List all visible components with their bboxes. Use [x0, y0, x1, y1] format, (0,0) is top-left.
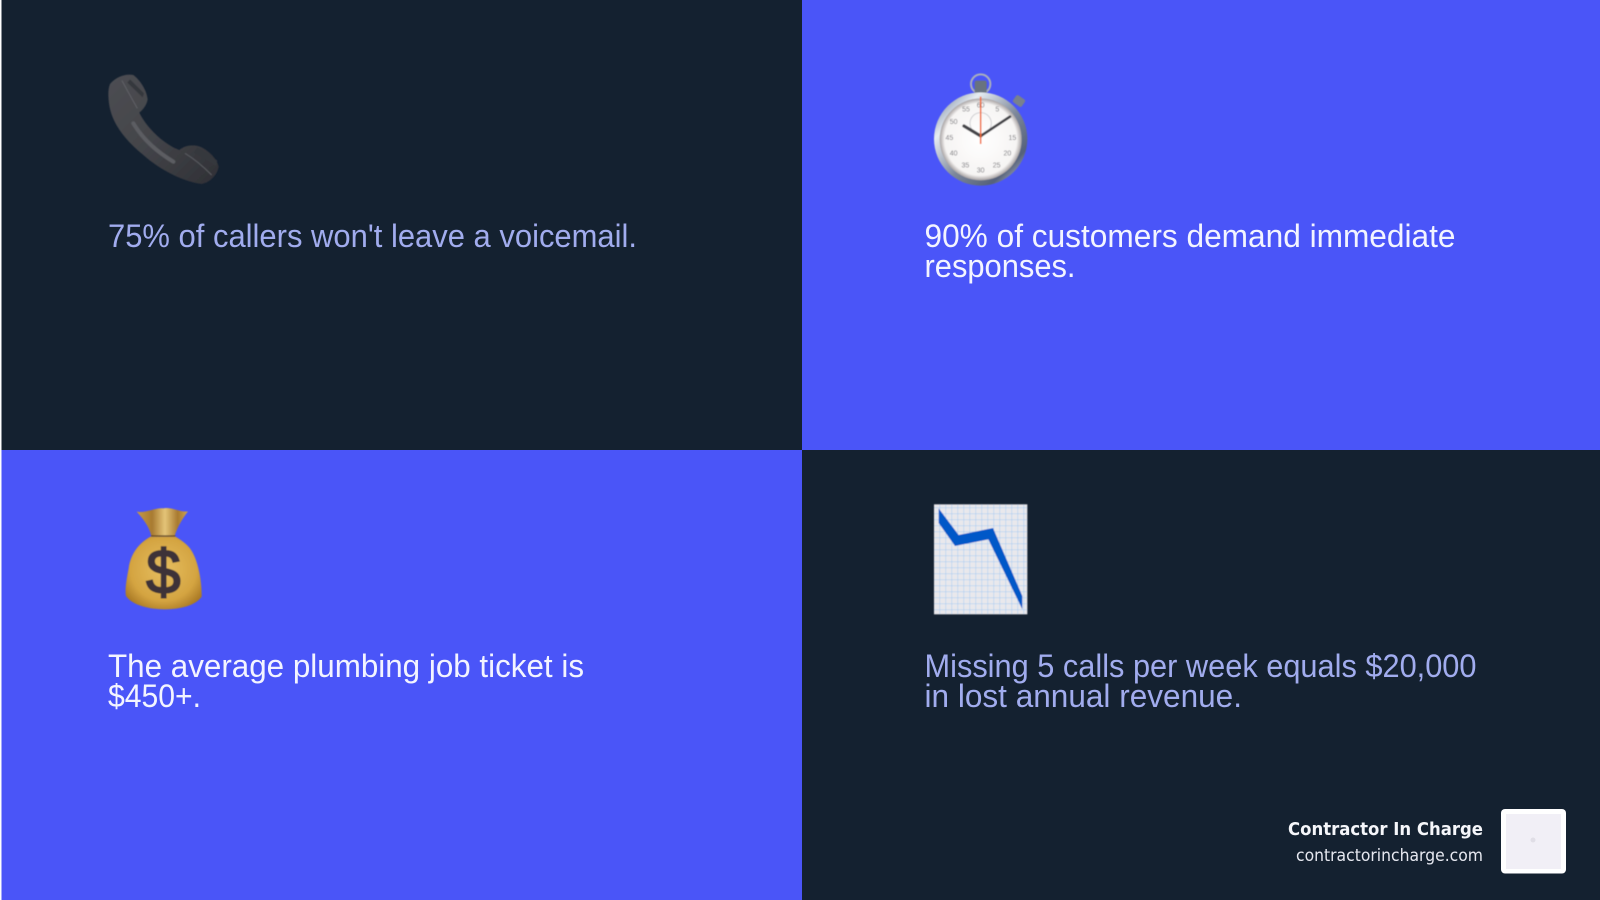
panel: average job ticket statistic	[2, 450, 802, 900]
statistic text: Missing 5 calls per week equals $20,000	[924, 648, 1476, 684]
dial numerals: 20	[1003, 151, 1011, 158]
dial numerals: 30	[977, 168, 985, 175]
panel: average job ticket statistic: $450+.	[108, 678, 201, 714]
statistic text: 75% of callers won't leave a voicemail.	[108, 218, 637, 254]
dial numerals: 40	[950, 151, 958, 158]
dial numerals: 5	[995, 107, 999, 114]
panel: immediate responses statistic	[802, 0, 1600, 450]
icon: money bag	[126, 508, 202, 609]
dial numerals: 15	[1008, 135, 1016, 142]
dial numerals	[945, 102, 1016, 175]
icon: stopwatch	[934, 74, 1027, 186]
panel: immediate responses statistic: responses.	[924, 248, 1076, 284]
dial numerals: 45	[945, 135, 953, 142]
statistic text: 90% of customers demand immediate	[924, 218, 1456, 254]
panel: voicemail statistic	[2, 0, 802, 450]
brand website: contractorincharge.com	[1296, 846, 1483, 865]
brand name: Contractor In Charge	[1288, 819, 1483, 840]
statistic text: The average plumbing job ticket is	[108, 648, 584, 684]
dial numerals: 35	[961, 163, 969, 170]
brand logo tile	[1501, 809, 1566, 874]
dial numerals: 55	[962, 107, 970, 114]
dial numerals: 25	[993, 163, 1001, 170]
panel: lost revenue statistic: in lost annual revenue.	[924, 678, 1242, 714]
dollar sign: $	[146, 538, 181, 607]
dial numerals: 50	[950, 119, 958, 126]
panel: lost revenue statistic	[802, 450, 1600, 900]
icon: telephone receiver	[108, 75, 219, 184]
icon: falling chart	[934, 504, 1027, 614]
brand footer	[1288, 809, 1566, 874]
dial numerals: 60	[977, 102, 985, 109]
